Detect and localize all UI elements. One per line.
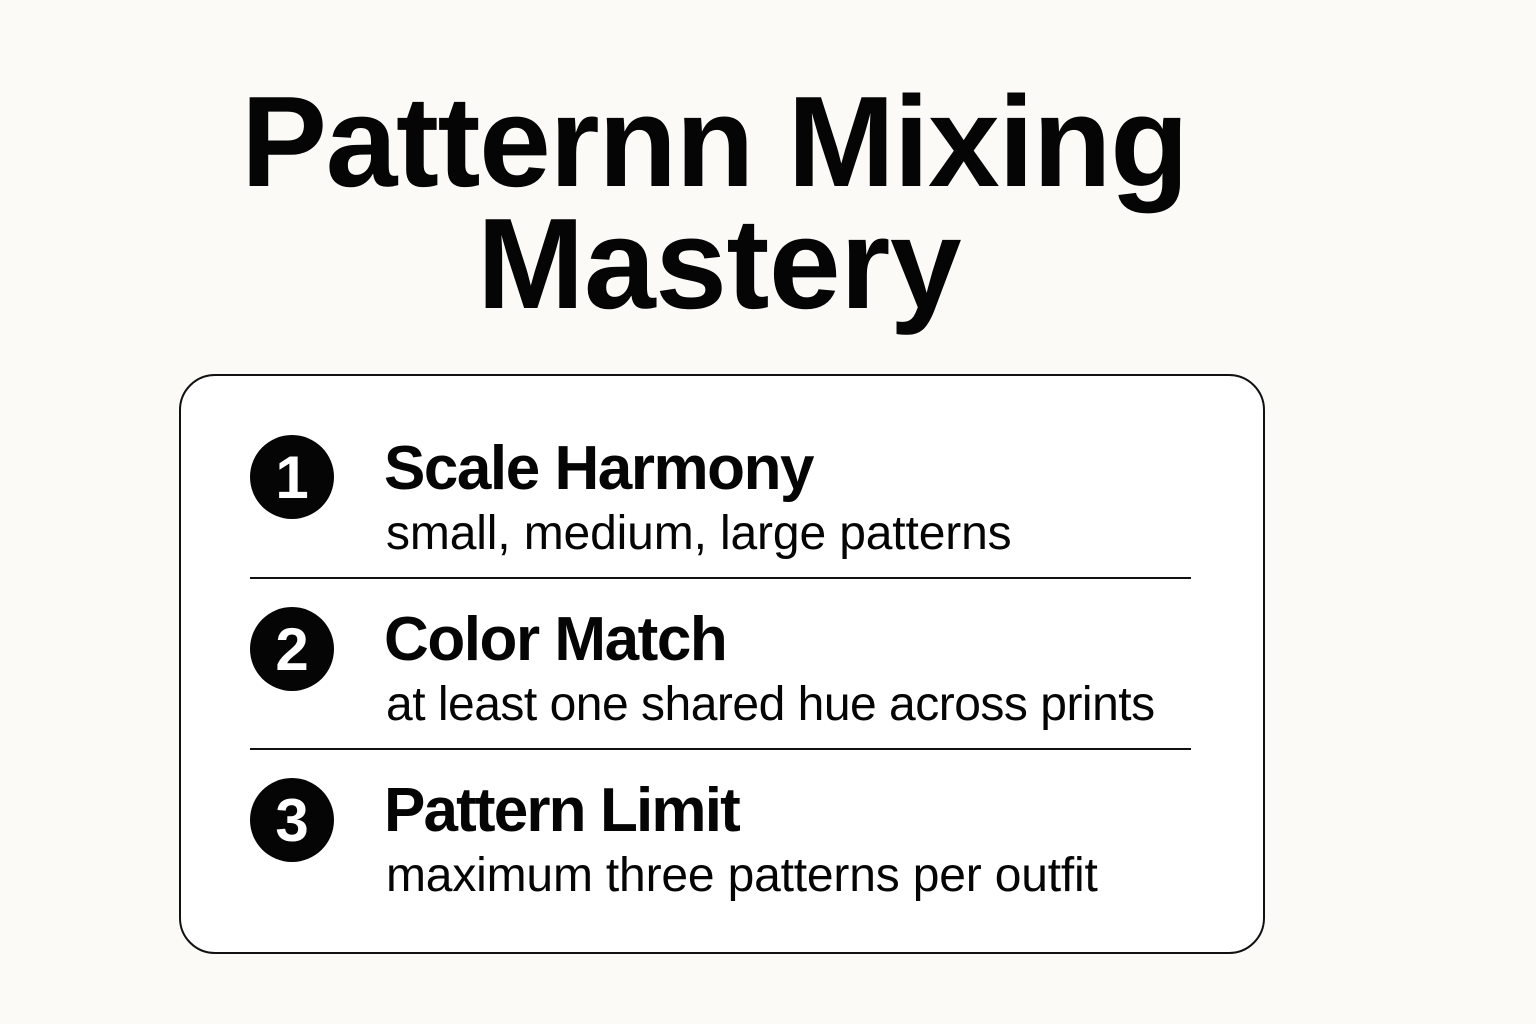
heading: color match: Color Match (384, 605, 726, 674)
text: scale harmony description: small, medium, large patterns (386, 507, 1012, 560)
icon: number 3 (250, 778, 334, 862)
heading: scale harmony: Scale Harmony (384, 434, 813, 503)
title (241, 70, 1188, 336)
icon: number 2 (250, 607, 334, 691)
panel: rules card (179, 374, 1265, 954)
title: Patternn Mixing (241, 70, 1188, 214)
icon: number 1 (250, 435, 334, 519)
icon: number 1: 1 (275, 444, 309, 511)
heading: pattern limit: Pattern Limit (384, 776, 739, 845)
title: Mastery (477, 192, 961, 336)
icon: number 2: 2 (275, 616, 309, 683)
text: color match description: at least one shared hue across prints (386, 678, 1155, 731)
text: pattern limit description: maximum three patterns per outfit (386, 849, 1098, 902)
icon: number 3: 3 (275, 787, 309, 854)
